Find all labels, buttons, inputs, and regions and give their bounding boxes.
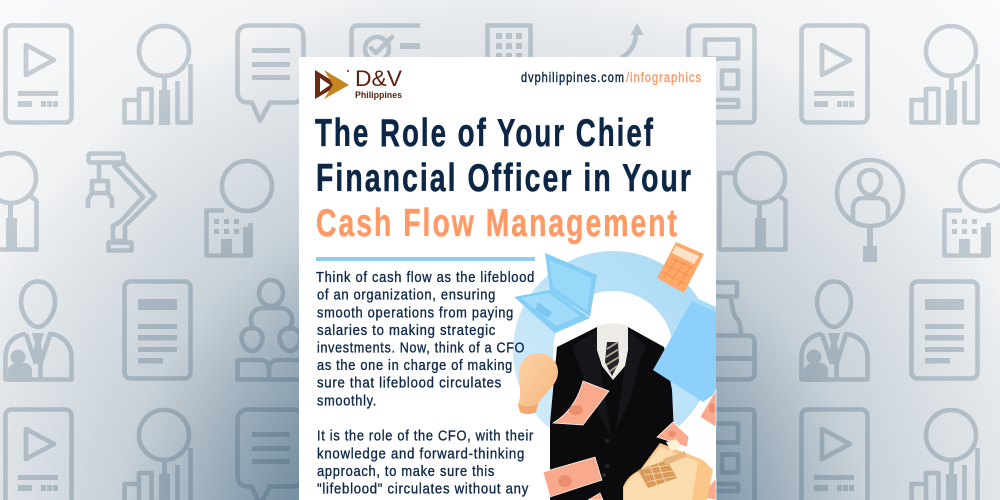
icon: magnifier person (837, 160, 903, 262)
icon: cash register (623, 439, 713, 500)
banknote portraits (558, 403, 715, 487)
role paragraph: "lifeblood" circulates without any (317, 482, 529, 498)
title: The Role of Your Chief (315, 112, 655, 155)
icon: magnifier chart row 4 (124, 410, 190, 500)
blue ring (513, 251, 713, 451)
icon: robot arm (88, 154, 155, 250)
logo: D&V Philippines (315, 66, 402, 100)
shirt collar (597, 324, 628, 380)
icon: magnifier chart row 4 right (912, 410, 978, 500)
role paragraph: It is the role of the CFO, with their (317, 429, 534, 445)
illustration: CFO suit with finance objects (513, 242, 716, 500)
icon: magnifier chart row 1 (124, 26, 190, 125)
intro paragraph: smoothly. (317, 393, 377, 409)
icon: play document row 4 right (802, 410, 868, 500)
icon: text document row 3 right (912, 282, 978, 378)
website link: /infographics (626, 70, 702, 85)
icon: play document row 4 (6, 410, 72, 500)
title: Financial Officer in Your (316, 157, 693, 200)
icon: text document row 3 (124, 282, 190, 378)
icon: light bulb (518, 353, 558, 414)
lapels (572, 330, 612, 440)
intro paragraph: smooth operations from paying (317, 305, 514, 321)
website link: dvphilippines.com (521, 70, 625, 85)
role paragraph: approach, to make sure this (317, 464, 495, 480)
icon: magnifier document left (0, 153, 36, 250)
icon: magnifier building left (206, 161, 272, 257)
intro paragraph: investments. Now, think of a CFO (317, 340, 525, 356)
title: Cash Flow Management (316, 202, 679, 245)
icon: magnifier building right (944, 161, 1000, 257)
intro paragraph: as the one in charge of making (317, 358, 513, 374)
title divider bar (316, 257, 535, 261)
icon: cash stack (690, 282, 755, 380)
icon: layout document row 4 (688, 410, 754, 500)
role paragraph: knowledge and forward-thinking (317, 446, 525, 462)
logo: D&V Philippines: Philippines (355, 90, 402, 100)
role paragraph (317, 429, 534, 498)
icon: magnifier chart row 1 right (912, 26, 978, 125)
icon: people on books (238, 280, 303, 380)
flying banknotes (543, 381, 716, 500)
intro paragraph: salaries to making strategic (317, 323, 496, 339)
intro paragraph (316, 270, 535, 409)
logo: D&V Philippines: D&V (355, 66, 402, 91)
icon: play document row 1 (6, 26, 72, 122)
icon: suit person row 3 (6, 282, 72, 382)
icon: play document row 1 right (802, 26, 868, 122)
intro paragraph: Think of cash flow as the lifeblood (316, 270, 535, 286)
necktie (605, 342, 619, 376)
icon: blue briefcase (514, 253, 597, 333)
panel: infographic card (299, 57, 716, 500)
icon: speech bubble row 1 (238, 26, 304, 121)
icon: rising arrow (621, 23, 644, 58)
icon: layout document row 1 (688, 26, 754, 122)
intro paragraph: of an organization, ensuring (317, 288, 496, 304)
icon: calculator (657, 242, 704, 293)
icon: blue folder (653, 297, 716, 402)
suit jacket (550, 324, 677, 500)
icon: speech bubble row 4 (238, 410, 304, 500)
title (315, 112, 693, 245)
intro paragraph: sure that lifeblood circulates (317, 376, 502, 392)
icon: checklist (352, 26, 420, 70)
icon: suit person row 3 right (802, 282, 868, 382)
icon: building (488, 26, 530, 70)
icon: magnifier document right (720, 153, 786, 250)
